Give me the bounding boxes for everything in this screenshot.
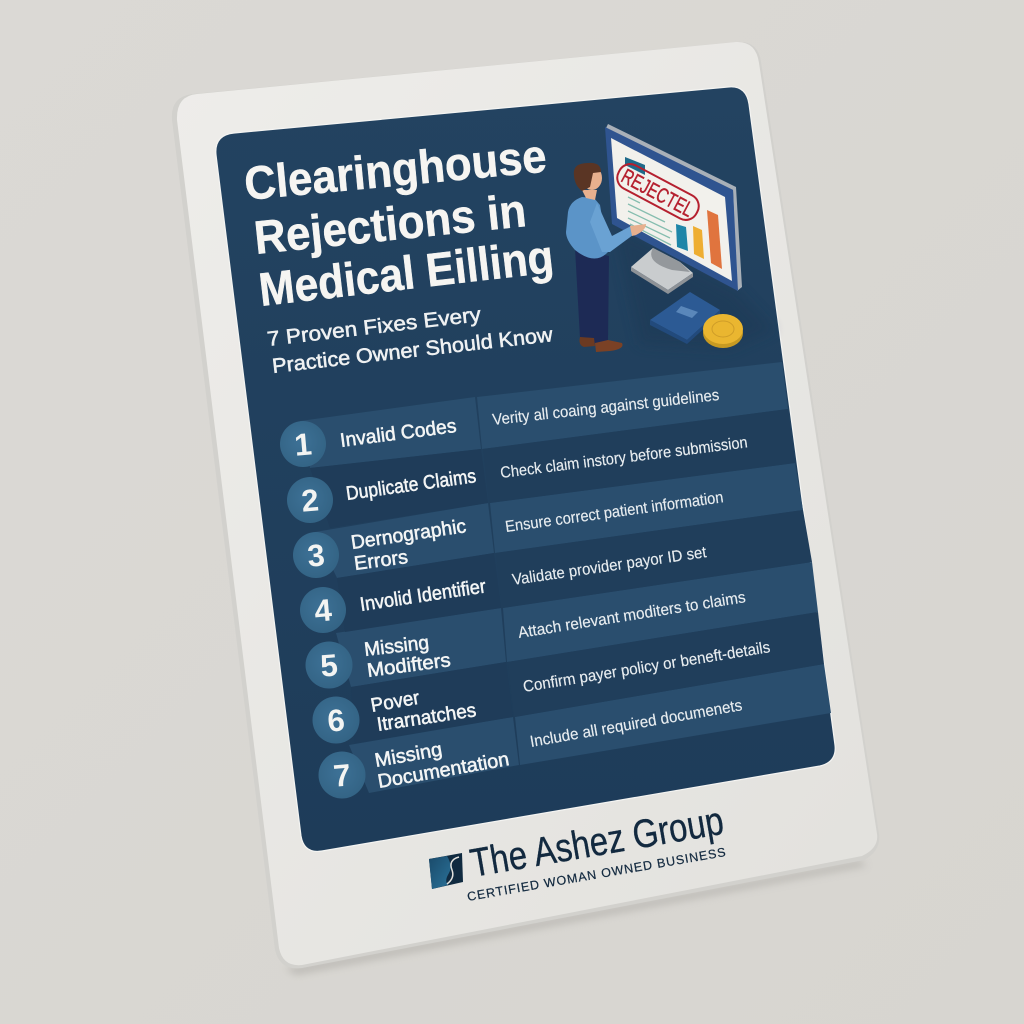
display card — [172, 42, 879, 968]
monitor stand — [631, 248, 693, 294]
fix descriptions: Ensure correct patient information — [504, 489, 725, 536]
problem labels: Pover — [369, 687, 422, 717]
logo — [429, 799, 727, 904]
light row bands, right column — [477, 362, 831, 765]
fix descriptions: Check claim instory before submission — [499, 434, 749, 482]
rejected stamp — [613, 160, 703, 224]
title: Rejections in — [252, 183, 529, 264]
fix descriptions: Include all required documenets — [529, 697, 743, 751]
light row bands, left column — [300, 397, 519, 793]
numbers: 6 — [326, 702, 346, 739]
problem labels: Invalid Codes — [339, 415, 458, 452]
navy panel — [216, 87, 835, 851]
dark row bands, right column — [483, 409, 824, 717]
numbers: 3 — [306, 537, 326, 574]
fix descriptions: Attach relevant moditers to claims — [517, 589, 747, 642]
numbers: 1 — [293, 426, 313, 463]
problem labels: Missing — [363, 632, 430, 661]
problem labels: Modifters — [366, 649, 452, 682]
fix descriptions — [492, 387, 771, 751]
tagline: CERTIFIED WOMAN OWNED BUSINESS — [466, 845, 727, 904]
subtitle: Practice Owner Should Know — [271, 323, 554, 378]
rejected stamp: REJECTEL — [617, 165, 697, 222]
person — [566, 163, 646, 352]
table of rejections and fixes — [280, 362, 831, 798]
problem labels: Documentation — [376, 748, 511, 793]
screen data lines — [628, 197, 672, 245]
problem labels: Dernographic — [350, 515, 468, 554]
problem labels: Duplicate Claims — [345, 465, 478, 505]
subtitle: 7 Proven Fixes Every — [266, 303, 483, 351]
floor shadow — [613, 225, 775, 350]
illustration: person at monitor with rejected claim — [566, 124, 775, 352]
subtitle — [266, 303, 554, 378]
title — [242, 129, 556, 316]
numbers: 4 — [313, 592, 334, 629]
numbers: 2 — [300, 482, 320, 519]
problem labels: Involid Identifier — [358, 575, 488, 616]
fix descriptions: Validate provider payor ID set — [511, 544, 708, 589]
numbers: 7 — [332, 757, 352, 794]
coin — [703, 314, 743, 348]
calculator — [650, 292, 720, 344]
card contact shadow — [285, 860, 866, 975]
monitor — [605, 124, 742, 291]
problem labels: Errors — [353, 546, 409, 575]
number badges — [280, 421, 366, 798]
logo mark — [429, 853, 463, 889]
title: Medical Eilling — [256, 229, 556, 316]
problem labels: Missing — [373, 738, 444, 772]
numbers: 5 — [319, 647, 339, 684]
problem labels — [339, 415, 511, 793]
fix descriptions: Verity all coaing against guidelines — [492, 387, 720, 429]
bars — [676, 210, 722, 269]
company name: The Ashez Group — [467, 799, 727, 886]
dark row bands, left column — [310, 449, 513, 743]
title: Clearinghouse — [242, 129, 549, 210]
numbers — [293, 426, 352, 794]
problem labels: Itrarnatches — [375, 699, 478, 736]
fix descriptions: Confirm payer policy or beneft-details — [522, 639, 771, 696]
